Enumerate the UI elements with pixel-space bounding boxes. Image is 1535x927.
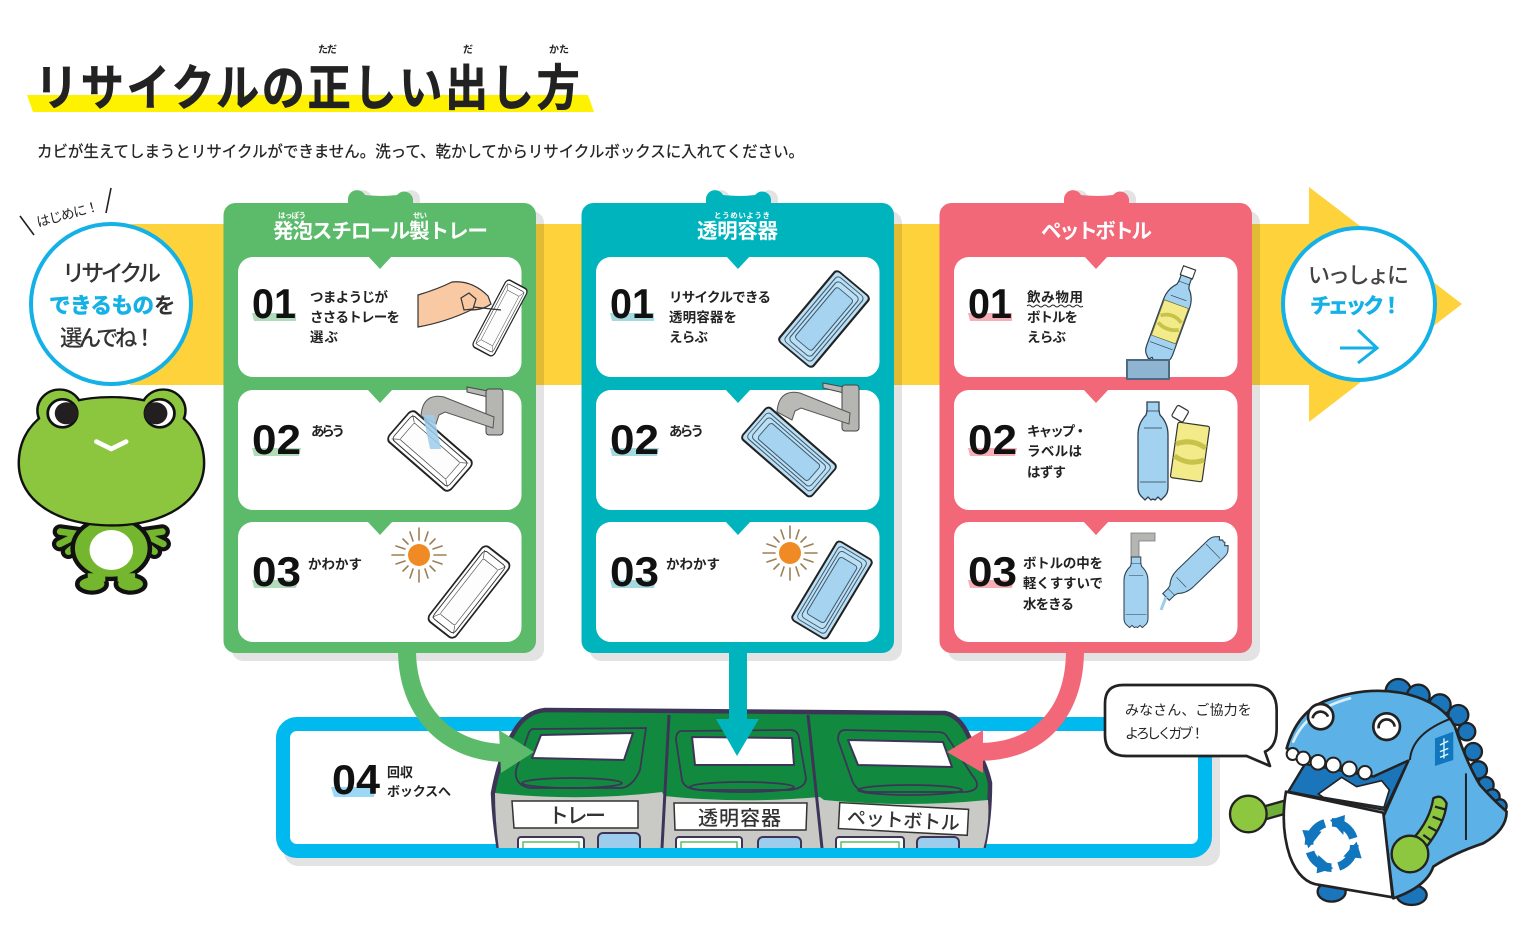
flow arrow band <box>130 187 1462 422</box>
step 01: clear containers: 透明容器を <box>669 309 737 325</box>
front arm <box>1392 797 1447 872</box>
bin label: PET bottles: ペットボトル <box>846 807 960 835</box>
title ruby <box>318 44 569 56</box>
title band <box>27 95 594 112</box>
feet <box>1318 882 1427 905</box>
step 02: clear containers: あらう <box>669 424 704 439</box>
panel heading: foam tray: 発泡スチロール製トレー <box>273 220 488 243</box>
teeth <box>1287 748 1372 779</box>
step 01: PET bottles: 01 <box>968 280 1012 327</box>
step 01: PET bottles: ボトルを <box>1027 310 1078 325</box>
panel: step 04 collection box <box>283 724 1220 866</box>
step 01: foam tray: 選ぶ <box>310 329 338 345</box>
step 03: foam tray: 03 <box>252 548 301 595</box>
eyes <box>1308 704 1400 740</box>
step 01: clear containers: えらぶ <box>669 330 708 345</box>
panel heading: foam tray: はっぽう <box>278 210 306 220</box>
step 01: clear containers: リサイクルできる <box>669 290 771 305</box>
step 02: PET bottles: はずす <box>1027 464 1066 480</box>
mouth <box>1288 761 1408 810</box>
step 02: PET bottles: 02 <box>968 416 1017 463</box>
start circle: リサイクル <box>62 260 161 286</box>
speech bubble: よろしくガブ！ <box>1125 725 1204 741</box>
step 02: clear containers <box>610 383 859 498</box>
start circle: 選んでね！ <box>60 326 156 351</box>
step 02: PET bottles <box>968 402 1210 500</box>
step 04 label <box>331 756 451 803</box>
step 01: PET bottles <box>968 263 1203 379</box>
step 03: clear containers: 03 <box>610 548 659 595</box>
step 03: PET bottles <box>968 533 1232 628</box>
step 01: clear containers: 01 <box>610 280 654 327</box>
logo patch <box>1435 732 1453 766</box>
panel heading: clear containers <box>697 210 778 243</box>
panel: foam tray <box>224 190 544 661</box>
icon: recycle <box>1302 815 1362 873</box>
step 01: foam tray: ささるトレーを <box>310 310 400 325</box>
speech bubble: みなさん、ご協力を <box>1125 702 1252 718</box>
step 01: PET bottles: 飲み物用 <box>1027 289 1083 305</box>
step 04 label: ボックスへ <box>387 784 451 799</box>
step 03: PET bottles: ボトルの中を <box>1023 555 1103 571</box>
frog head <box>20 391 203 524</box>
step 01: foam tray: 01 <box>252 280 296 327</box>
step 03: foam tray: かわかす <box>308 557 362 572</box>
frog body <box>73 518 150 593</box>
step 02: foam tray: あらう <box>311 424 345 439</box>
step 02: PET bottles: キャップ・ <box>1027 424 1087 439</box>
step 02: foam tray: 02 <box>252 416 301 463</box>
panel heading: PET bottles: ペットボトル <box>1041 220 1152 243</box>
bin label: tray <box>512 801 638 828</box>
dinosaur mascot with speech bubble <box>1105 679 1507 905</box>
body <box>1287 691 1507 898</box>
step 04 label: 回収 <box>387 765 413 780</box>
step 01: foam tray: つまようじが <box>310 289 388 305</box>
icon: right arrow <box>1340 330 1377 363</box>
step 01: foam tray <box>252 279 528 357</box>
title: リサイクルの正しい出し方 <box>35 60 580 116</box>
start label <box>20 188 111 235</box>
step 03: PET bottles: 03 <box>968 548 1017 595</box>
panel heading: clear containers: とうめいようき <box>714 210 770 220</box>
step 02: clear containers: 02 <box>610 416 659 463</box>
frog arms <box>60 532 163 552</box>
end circle: チェック！ <box>1310 295 1402 318</box>
panel heading: clear containers: 透明容器 <box>697 220 778 243</box>
step 01: clear containers <box>610 270 870 368</box>
start label: はじめに！ <box>35 199 101 230</box>
bin label: tray: トレー <box>548 805 606 828</box>
title ruby: かた <box>549 44 569 56</box>
trays in mouth <box>1318 777 1389 807</box>
panel heading: foam tray: せい <box>413 211 428 220</box>
box front <box>1284 792 1393 897</box>
step 03: clear containers: かわかす <box>666 557 720 572</box>
end circle <box>1283 228 1435 380</box>
arrow: green to tray bin <box>407 650 534 773</box>
bin label: clear containers <box>674 803 807 830</box>
step 03: PET bottles: 水をきる <box>1023 597 1074 612</box>
title ruby: だ <box>463 44 473 56</box>
speech bubble <box>1105 685 1277 766</box>
start circle: できるもの <box>49 294 154 318</box>
arrow: red to PET bin <box>947 650 1075 773</box>
panel: clear containers <box>582 190 902 661</box>
panel heading: foam tray <box>273 210 488 243</box>
frog mascot <box>20 391 203 593</box>
step 03: clear containers <box>610 526 873 640</box>
step 03: PET bottles: 軽くすすいで <box>1023 576 1103 591</box>
start circle: を <box>154 294 176 318</box>
intro text: カビが生えてしまうとリサイクルができません。洗って、乾かしてからリサイクルボックスに入れてください。 <box>37 143 804 161</box>
step 03: foam tray <box>252 528 512 640</box>
start circle <box>31 224 191 384</box>
recycling bins <box>493 710 990 853</box>
bin label: clear containers: 透明容器 <box>698 807 781 830</box>
step 02: PET bottles: ラベルは <box>1027 444 1082 459</box>
title ruby: ただ <box>318 44 337 56</box>
back spikes <box>1386 679 1507 813</box>
panel: PET bottles <box>940 190 1260 661</box>
step 01: PET bottles: えらぶ <box>1027 330 1066 345</box>
end circle: いっしょに <box>1308 263 1409 288</box>
back arm <box>1230 796 1287 832</box>
arrow: teal to clear bin <box>716 650 759 756</box>
step 02: foam tray <box>252 387 503 493</box>
step 04 label: 04 <box>332 756 381 803</box>
